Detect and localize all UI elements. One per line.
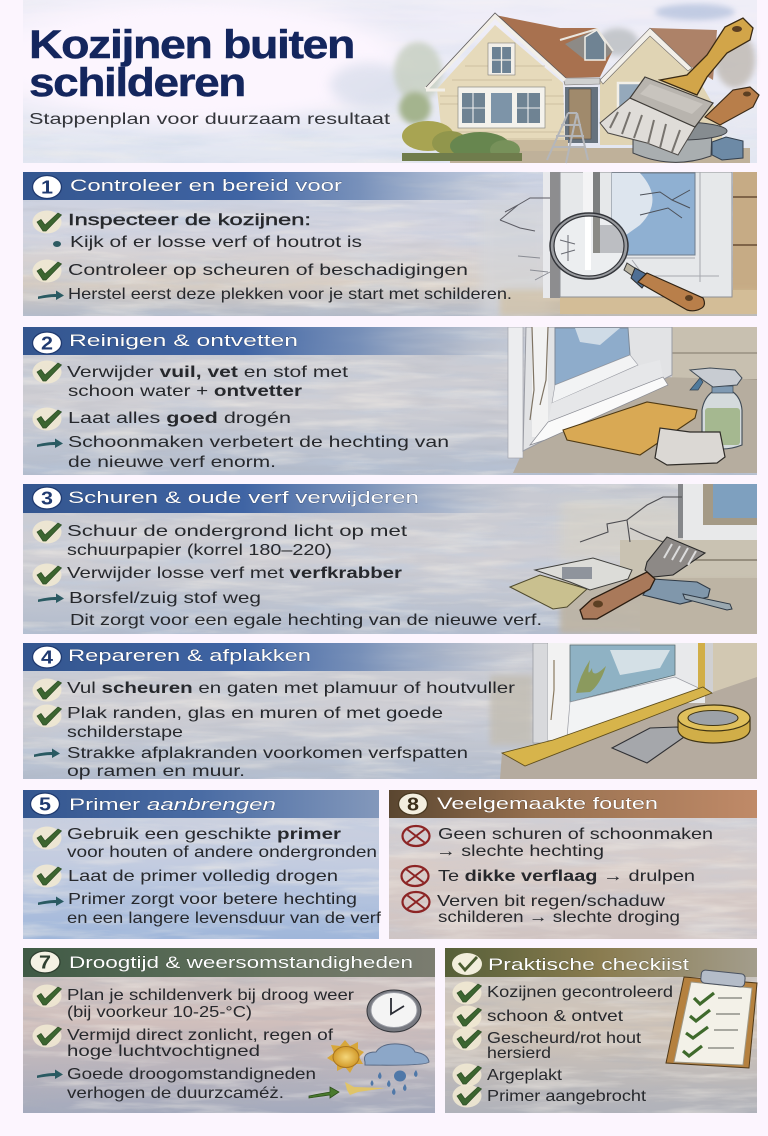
list items	[402, 826, 713, 926]
icon: sun	[327, 1040, 364, 1073]
number badge	[30, 951, 60, 973]
icon: check	[452, 1084, 482, 1108]
icon: arrow	[34, 748, 60, 758]
item: hersierd: hersierd	[487, 1045, 551, 1062]
item: inspecteer: Inspecteer de kozijnen:	[68, 212, 311, 229]
item: bij voorkeur: (bij voorkeur 10-25-°C)	[67, 1004, 252, 1021]
item: op ramen: op ramen en muur.	[67, 763, 245, 780]
illustration: window with crack	[480, 172, 757, 316]
right wing	[600, 35, 722, 145]
list items	[452, 982, 673, 1108]
heading: Repareren & afplakken	[68, 646, 311, 665]
heading: Primer aanbrengen	[69, 795, 276, 814]
icon: ladder	[547, 113, 588, 163]
heading: Reinigen & ontvetten	[69, 331, 298, 350]
icon: check	[452, 1006, 482, 1028]
icon: check	[452, 1028, 482, 1050]
icon: check	[452, 1064, 482, 1086]
icon: check	[32, 704, 62, 728]
icon: cross	[402, 866, 428, 886]
illustration: window with masking tape	[490, 643, 757, 779]
heading: Veelgemaakte fouten	[437, 794, 658, 813]
item: hoge: hoge luchtvochtigned	[67, 1043, 260, 1060]
icon: magnifying glass	[550, 210, 704, 311]
panel 4: repareren en afplakken	[23, 643, 757, 780]
item: schilderstape: schilderstape	[67, 724, 183, 741]
number badge	[32, 332, 62, 354]
item: gebruik: Gebruik een geschikte primer	[67, 826, 341, 843]
icon: check	[452, 982, 482, 1004]
item: dit zorgt: Dit zorgt voor een egale hechting van de nieuwe verf.	[70, 612, 542, 629]
item: controleer: Controleer op scheuren of beschadigingen	[68, 262, 468, 279]
icon: green arrow	[309, 1087, 339, 1098]
panel header	[23, 172, 757, 200]
panel: praktische checklist	[445, 948, 757, 1113]
heading: Praktische checkiist	[488, 955, 689, 974]
item: schuurpapier: schuurpapier (korrel 180–220)	[67, 542, 332, 559]
icon: arrow	[37, 1070, 63, 1079]
number badge: 3	[41, 488, 53, 508]
upper window	[488, 43, 515, 75]
door	[565, 87, 598, 143]
heading: Droogtijd & weersomstandigheden	[69, 953, 413, 972]
main wall	[437, 25, 565, 145]
item: argeplakt: Argeplakt	[487, 1067, 563, 1084]
illustration: window corner and wall crack	[560, 484, 757, 634]
item: schoon water: schoon water + ontvetter	[68, 383, 302, 400]
item: verwijder: Verwijder losse verf met verfkrabber	[67, 565, 402, 582]
icon: rain cloud	[364, 1044, 429, 1095]
number badge	[398, 793, 428, 815]
icon: wind spark	[345, 1082, 385, 1095]
icon: clipboard	[666, 970, 757, 1068]
item: herstel: Herstel eerst deze plekken voor je start met schilderen.	[68, 286, 512, 303]
number badge	[32, 487, 62, 509]
watercolor banner wash	[23, 0, 757, 163]
number badge: 2	[41, 334, 53, 354]
panel 5: primer aanbrengen	[23, 790, 382, 939]
illustration: window sill	[508, 327, 757, 473]
panel header	[23, 948, 435, 977]
icon: check	[32, 564, 62, 586]
item: verven: Verven bit regen/schaduw	[437, 893, 666, 910]
panel 2: reinigen en ontvetten	[23, 327, 757, 475]
panel header	[389, 790, 757, 818]
list items	[32, 826, 382, 927]
panel header	[23, 484, 757, 513]
item: schuur: Schuur de ondergrond licht op met	[67, 523, 408, 540]
heading: Controleer en bereid voor	[70, 176, 342, 195]
list items	[32, 678, 515, 780]
icon: scraper	[580, 537, 705, 619]
icon: arrow	[37, 438, 63, 448]
check badge	[452, 953, 482, 975]
number badge: 1	[41, 178, 53, 198]
item: geen schuren: Geen schuren of schoonmaken	[438, 826, 713, 843]
title: schilderen	[29, 61, 245, 105]
item: kozijnen: Kozijnen gecontroleerd	[487, 984, 673, 1001]
item: strakke: Strakke afplakranden voorkomen verfspatten	[67, 745, 468, 762]
icon: arrow	[38, 594, 64, 603]
icon: paint bucket	[633, 122, 743, 162]
icon: check	[32, 260, 62, 282]
background trees	[394, 42, 442, 102]
item: schoonmaken: Schoonmaken verbetert de hechting van	[68, 434, 449, 451]
number badge: 4	[41, 648, 53, 668]
icon: check	[32, 984, 62, 1008]
item: goede: Goede droogomstandigneden	[67, 1066, 316, 1083]
number badge: 5	[39, 794, 51, 814]
shrubs	[402, 121, 522, 161]
item: schilderen: schilderen → slechte droging	[438, 909, 680, 926]
number badge: 7	[39, 952, 51, 972]
icon: sandpaper	[510, 558, 632, 609]
list items	[32, 210, 512, 303]
list items	[32, 984, 354, 1102]
icon: large paint brush	[600, 18, 753, 155]
item: primer zorgt: Primer zorgt voor betere hechting	[68, 891, 357, 908]
panel 8: veelgemaakte fouten	[389, 790, 757, 939]
icon: check	[32, 1024, 62, 1048]
icon: yellow cloth	[563, 402, 697, 455]
item: gescheurd: Gescheurd/rot hout	[487, 1030, 642, 1047]
heading: Schuren & oude verf verwijderen	[68, 488, 419, 507]
title	[29, 23, 354, 105]
icon: clock	[367, 990, 421, 1032]
item: borstel: Borsfel/zuig stof weg	[69, 590, 261, 607]
icon: white stone rag	[655, 428, 725, 465]
icon: check	[32, 210, 62, 234]
number badge	[30, 793, 60, 815]
title: Kozijnen buiten	[29, 23, 354, 67]
item: plan: Plan je schildenverk bij droog weer	[67, 987, 354, 1004]
panel 1: controleer en bereid voor	[23, 172, 757, 316]
icon: arrow	[38, 896, 64, 906]
icon: bullet	[53, 241, 61, 247]
icon: tape roll	[678, 705, 750, 743]
icon: check	[32, 520, 62, 544]
item: vermijd: Vermijd direct zonlicht, regen of	[67, 1027, 334, 1044]
panel 3: schuren en oude verf verwijderen	[23, 484, 757, 634]
item: kijk: Kijk of er losse verf of houtrot is	[70, 234, 362, 251]
list items	[32, 520, 542, 629]
header banner with title and house illustration	[0, 0, 759, 163]
icon: grey tool	[643, 579, 732, 610]
icon: check	[32, 826, 62, 850]
panel header	[23, 327, 757, 355]
panel 7: droogtijd en weersomstandigheden	[23, 948, 435, 1113]
icon: putty knife	[612, 727, 687, 763]
icon: spray bottle	[690, 368, 742, 449]
item: primer: Primer aangebrocht	[487, 1088, 647, 1105]
icon: arrow	[38, 290, 64, 300]
item: slechte hechting: → slechte hechting	[436, 843, 604, 860]
icon: cross	[402, 826, 430, 846]
item: verhogen: verhogen de duurzcaméż.	[67, 1085, 284, 1102]
number badge	[32, 646, 62, 668]
panel header	[23, 790, 379, 818]
number badge	[32, 176, 62, 198]
item: schoon: schoon & ontvet	[487, 1008, 624, 1025]
item: plak: Plak randen, glas en muren of met goede	[67, 705, 443, 722]
panel header	[23, 643, 757, 671]
item: de nieuwe verf: de nieuwe verf enorm.	[68, 454, 276, 471]
dormer	[565, 29, 613, 60]
item: levensduur: en een langere levensduur van de verf	[67, 910, 382, 927]
icon: cross	[402, 892, 430, 912]
house illustration	[394, 13, 759, 163]
item: vul: Vul scheuren en gaten met plamuur of houtvuller	[67, 680, 515, 697]
item: te dikke: Te dikke verflaag → drulpen	[438, 868, 695, 885]
icon: check	[32, 360, 62, 384]
icon: small brush	[705, 87, 759, 125]
icon: check	[32, 678, 62, 702]
ground	[450, 148, 750, 163]
item: laat: Laat de primer volledig drogen	[68, 868, 338, 885]
item: laat drogen: Laat alles goed drogén	[68, 410, 291, 427]
panel header	[445, 948, 757, 977]
list items	[32, 360, 449, 471]
number badge: 8	[407, 794, 419, 814]
item: voor houten: voor houten of andere ondergronden	[67, 844, 377, 861]
item: verwijder vuil: Verwijder vuil, vet en stof met	[67, 364, 349, 381]
subtitle: Stappenplan voor duurzaam resultaat	[29, 111, 391, 128]
main roof	[495, 15, 613, 78]
icon: check	[32, 864, 62, 888]
icon: check	[32, 408, 62, 430]
big window	[458, 87, 545, 128]
